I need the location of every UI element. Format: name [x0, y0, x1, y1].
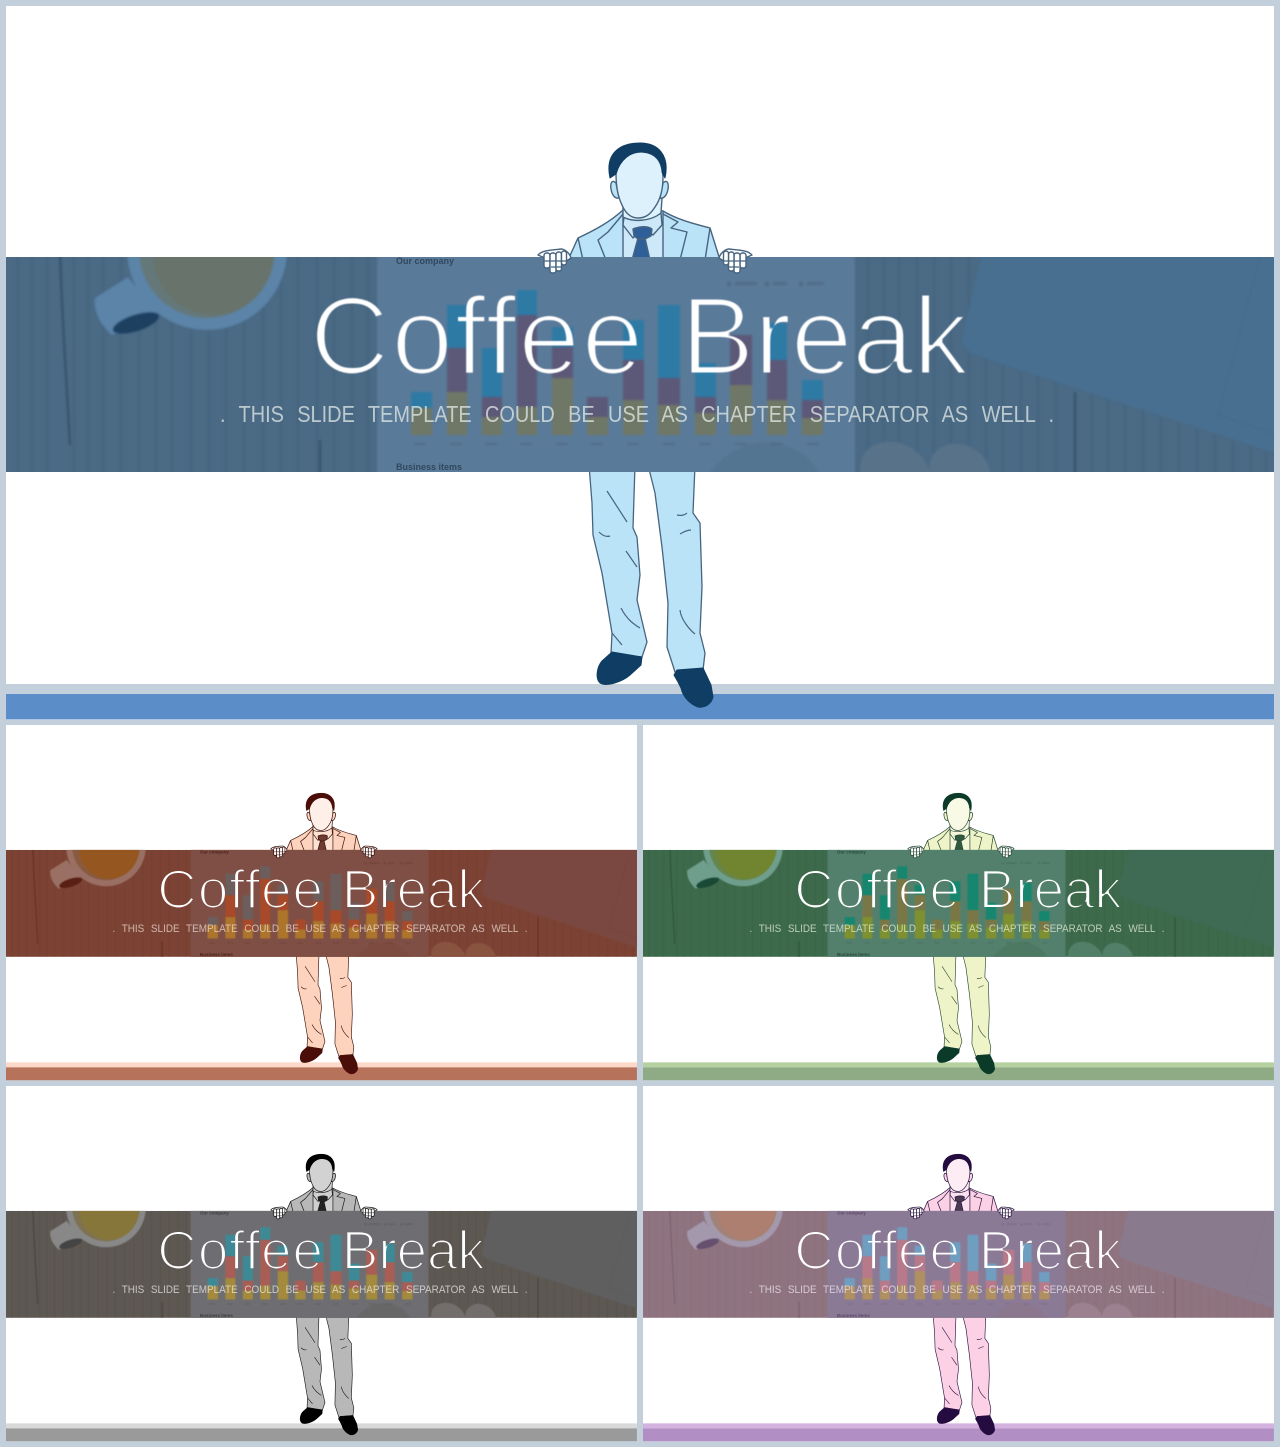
chart label: our company: Our company — [396, 256, 454, 266]
photo band — [643, 1168, 1277, 1339]
panel: purple slide — [643, 1086, 1277, 1441]
slide background — [6, 6, 1274, 720]
chart label: our company: Our company — [837, 849, 866, 854]
subtitle: . THIS SLIDE TEMPLATE COULD BE USE AS CHAPTER SEPARATOR AS WELL . — [220, 401, 1054, 427]
icon: left hand — [538, 249, 571, 273]
title: Break — [681, 275, 969, 398]
icon: right hand — [719, 249, 752, 273]
chart label: business items: Business items — [837, 1313, 870, 1318]
illustration: businessman upper body — [923, 1154, 998, 1212]
icon: right hand — [361, 1207, 377, 1219]
chart label: our company: Our company — [200, 1210, 229, 1215]
bottom bars — [6, 1423, 637, 1441]
illustration: businessman legs and shoes — [296, 1314, 358, 1435]
chart label: our company: Our company — [200, 849, 229, 854]
slide background — [6, 725, 637, 1080]
subtitle: . THIS SLIDE TEMPLATE COULD BE USE AS CHAPTER SEPARATOR AS WELL . — [749, 1284, 1164, 1296]
slide background — [643, 725, 1274, 1080]
photo band — [6, 1168, 640, 1339]
title: Break — [979, 858, 1122, 920]
photo band — [643, 807, 1277, 978]
icon: right hand — [998, 846, 1014, 858]
slide background — [6, 1086, 637, 1441]
title: Coffee — [157, 1219, 340, 1281]
illustration: businessman upper body — [286, 793, 361, 851]
icon: right hand — [998, 1207, 1014, 1219]
illustration: businessman legs and shoes — [589, 465, 713, 707]
photo band: coffee cup, chart report and tablet on wood — [6, 170, 1280, 513]
photo band — [6, 807, 640, 978]
subtitle: . THIS SLIDE TEMPLATE COULD BE USE AS CHAPTER SEPARATOR AS WELL . — [749, 923, 1164, 935]
illustration: businessman legs and shoes — [296, 953, 358, 1074]
title: Break — [342, 1219, 485, 1281]
icon: right hand — [361, 846, 377, 858]
bottom bars — [6, 1062, 637, 1080]
bottom bars — [643, 1062, 1274, 1080]
illustration: businessman upper body — [568, 143, 720, 260]
panel: blue slide (main) — [6, 6, 1280, 720]
chart label: business items: Business items — [200, 952, 233, 957]
illustration: businessman legs and shoes — [933, 953, 995, 1074]
subtitle: . THIS SLIDE TEMPLATE COULD BE USE AS CHAPTER SEPARATOR AS WELL . — [112, 923, 527, 935]
panel: green slide — [643, 725, 1277, 1080]
title: Coffee — [794, 858, 977, 920]
icon: left hand — [908, 1207, 924, 1219]
title: Coffee — [310, 275, 678, 398]
icon: left hand — [271, 1207, 287, 1219]
chart label: business items: Business items — [837, 952, 870, 957]
panel: gray slide — [6, 1086, 640, 1441]
illustration: businessman legs and shoes — [933, 1314, 995, 1435]
chart label: our company: Our company — [837, 1210, 866, 1215]
title: Coffee — [157, 858, 340, 920]
bottom bars — [643, 1423, 1274, 1441]
panel: orange slide — [6, 725, 640, 1080]
title: Coffee — [794, 1219, 977, 1281]
illustration: businessman upper body — [923, 793, 998, 851]
chart label: business items: Business items — [396, 462, 462, 472]
icon: left hand — [908, 846, 924, 858]
title: Break — [979, 1219, 1122, 1281]
illustration: businessman upper body — [286, 1154, 361, 1212]
subtitle: . THIS SLIDE TEMPLATE COULD BE USE AS CHAPTER SEPARATOR AS WELL . — [112, 1284, 527, 1296]
title: Break — [342, 858, 485, 920]
icon: left hand — [271, 846, 287, 858]
chart label: business items: Business items — [200, 1313, 233, 1318]
slide background — [643, 1086, 1274, 1441]
bottom bars — [6, 684, 1274, 720]
